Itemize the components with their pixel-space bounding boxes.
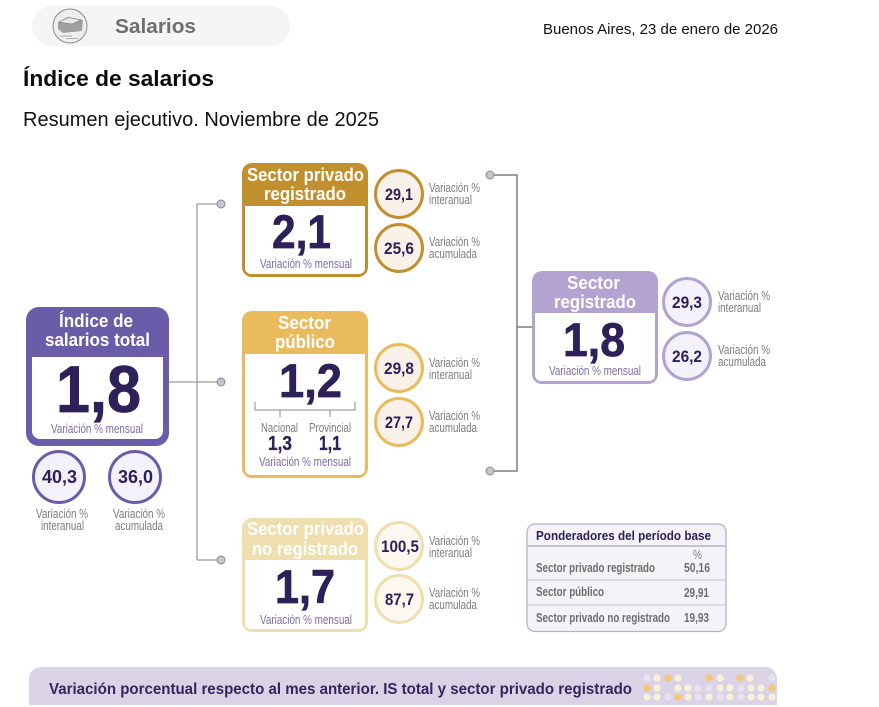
metric: público acumulada — [376, 398, 480, 446]
metric: registrado acumulada: Variación % — [718, 342, 770, 357]
panel: sector público: 1,3 — [268, 433, 292, 455]
metric: privado registrado interanual: Variación % — [429, 180, 480, 195]
panel: sector privado no registrado: 1,7 — [275, 560, 335, 613]
panel: sector privado no registrado: no registrado — [252, 539, 358, 559]
panel: sector público: 1,2 — [279, 354, 342, 407]
bracket: nacional y provincial — [255, 402, 355, 417]
metric: registrado interanual: Variación % — [718, 288, 770, 303]
table: ponderadores del período base: 19,93 — [684, 610, 709, 625]
metric: público acumulada: 27,7 — [385, 413, 413, 432]
metric: no registrado acumulada — [376, 576, 480, 622]
metric: no registrado interanual — [376, 522, 480, 570]
metric: total acumulada: Variación % — [113, 506, 165, 521]
table: ponderadores del período base — [527, 524, 726, 632]
panel: sector público: público — [275, 332, 335, 352]
panel: sector público — [242, 311, 368, 478]
panel: sector privado registrado: Sector privado — [247, 165, 364, 185]
panel: sector privado registrado — [242, 163, 368, 277]
subtitle: Resumen ejecutivo. Noviembre de 2025 — [23, 109, 379, 131]
metric: registrado interanual: 29,3 — [672, 293, 702, 312]
metric: público interanual — [376, 344, 480, 392]
metric: registrado interanual: interanual — [718, 300, 761, 315]
metric: privado registrado interanual: 29,1 — [385, 185, 413, 204]
panel: sector público: Sector — [278, 313, 331, 333]
metric: total acumulada — [110, 452, 165, 533]
metric: registrado acumulada: acumulada — [718, 354, 767, 369]
panel: índice de salarios total: Índice de — [59, 310, 133, 331]
panel: sector registrado: Variación % mensual — [549, 363, 641, 378]
metric: total interanual: 40,3 — [42, 467, 77, 487]
panel: índice de salarios total: 1,8 — [56, 352, 141, 426]
panel: sector público: Variación % mensual — [259, 454, 351, 469]
metric: público interanual: interanual — [429, 367, 472, 382]
metric: no registrado acumulada: 87,7 — [385, 590, 414, 609]
banner: variación porcentual: Variación porcentual respecto al mes anterior. IS total y sector privado registrado — [49, 681, 632, 698]
metric: privado registrado interanual: interanual — [429, 192, 472, 207]
metric: registrado acumulada: 26,2 — [672, 347, 702, 366]
panel: sector privado registrado: 2,1 — [272, 205, 331, 258]
metric: total interanual: interanual — [41, 518, 84, 533]
metric: público interanual: Variación % — [429, 355, 480, 370]
panel: índice de salarios total: salarios total — [45, 330, 150, 350]
decorative dots — [643, 674, 776, 701]
header pill — [32, 6, 290, 46]
metric: privado registrado interanual — [376, 170, 480, 218]
metric: no registrado interanual: 100,5 — [381, 537, 419, 556]
icon: salary banknotes — [53, 9, 87, 43]
metric: privado registrado acumulada: 25,6 — [384, 239, 414, 258]
right connector — [486, 171, 532, 475]
panel: sector registrado: registrado — [554, 292, 636, 312]
metric: público acumulada: Variación % — [429, 408, 480, 423]
metric: registrado interanual — [664, 278, 770, 326]
metric: público interanual: 29,8 — [384, 359, 414, 378]
table: ponderadores del período base: Ponderadores del período base — [536, 528, 711, 543]
table: ponderadores del período base: % — [693, 547, 702, 562]
panel: sector público: 1,1 — [319, 433, 341, 455]
panel: sector registrado: Sector — [567, 273, 620, 293]
panel: sector público: Nacional — [261, 420, 298, 435]
left connector — [169, 200, 225, 564]
metric: no registrado interanual: interanual — [429, 545, 472, 560]
panel: índice de salarios total — [26, 307, 169, 446]
panel: sector público: Provincial — [309, 420, 351, 435]
table: ponderadores del período base: Sector público — [536, 584, 604, 599]
metric: registrado acumulada — [664, 332, 770, 380]
panel: sector privado no registrado: Variación % mensual — [260, 612, 352, 627]
panel: sector privado no registrado: Sector privado — [247, 519, 364, 539]
metric: privado registrado acumulada: acumulada — [429, 246, 478, 261]
metric: no registrado acumulada: Variación % — [429, 585, 480, 600]
metric: privado registrado acumulada — [376, 224, 480, 272]
metric: público acumulada: acumulada — [429, 420, 478, 435]
table: ponderadores del período base: 50,16 — [684, 560, 710, 575]
metric: total acumulada: 36,0 — [118, 467, 153, 487]
metric: total interanual — [34, 452, 88, 533]
panel: sector registrado — [532, 271, 658, 384]
metric: total interanual: Variación % — [36, 506, 88, 521]
panel: sector privado no registrado — [242, 518, 368, 632]
table: ponderadores del período base: Sector privado no registrado — [536, 610, 670, 625]
section name: Salarios — [115, 16, 196, 38]
panel: sector privado registrado: Variación % mensual — [260, 256, 352, 271]
title: Índice de salarios — [23, 66, 214, 91]
metric: no registrado acumulada: acumulada — [429, 597, 478, 612]
date: Buenos Aires, 23 de enero de 2026 — [543, 21, 778, 38]
panel: sector privado registrado: registrado — [264, 184, 346, 204]
banner: variación porcentual — [29, 667, 777, 705]
metric: privado registrado acumulada: Variación % — [429, 234, 480, 249]
table: ponderadores del período base: 29,91 — [684, 585, 709, 600]
panel: índice de salarios total: Variación % mensual — [51, 421, 143, 436]
metric: total acumulada: acumulada — [115, 518, 164, 533]
panel: sector registrado: 1,8 — [563, 313, 625, 366]
metric: no registrado interanual: Variación % — [429, 533, 480, 548]
table: ponderadores del período base: Sector privado registrado — [536, 560, 655, 575]
